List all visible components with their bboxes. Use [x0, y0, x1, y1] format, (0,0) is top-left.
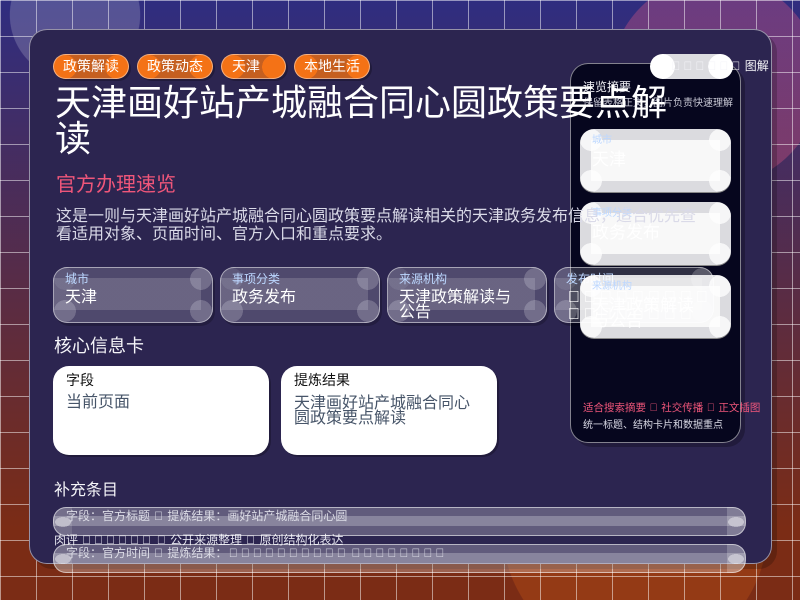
fact card: 发布时间 — [554, 267, 714, 323]
fact card: 发布时间:  — [568, 289, 712, 306]
side card: 来源机构: 天津政策解读 — [592, 291, 694, 316]
note line: 肉评   公开来源整理  原创结构化表达 — [54, 531, 344, 548]
intro paragraph: 这是一则与天津画好站产城融合同心圆政策要点解读相关的天津政务发布信息，适合优先查 — [56, 202, 696, 226]
fact card: 事项分类: 政务发布 — [232, 283, 296, 307]
intro paragraph — [56, 202, 696, 244]
top right label:  图解 — [671, 57, 769, 74]
side card: 事项分类: 事项分类 — [592, 204, 632, 219]
title — [55, 74, 667, 162]
tag: 天津: 天津 — [232, 56, 260, 76]
list row 2 — [53, 544, 746, 573]
top right pill — [650, 54, 733, 79]
title: 天津画好站产城融合同心圆政策要点解 — [55, 74, 667, 126]
list row 1: 字段：官方标题  提炼结果：画好站产城融合同心圆 — [66, 507, 347, 524]
intro paragraph: 看适用对象、页面时间、官方入口和重点要求。 — [56, 220, 392, 244]
side card: 来源机构: 来源机构 — [592, 277, 632, 292]
info card: 提炼结果: 天津画好站产城融合同心 — [294, 389, 470, 413]
side card: 事项分类 — [580, 202, 731, 265]
fact card: 来源机构: 天津政策解读与 — [399, 283, 511, 307]
section heading: 核心信息卡: 核心信息卡 — [54, 332, 144, 358]
tag: 政策解读 — [53, 54, 129, 79]
side panel note: use cases: 适合搜索摘要  社交传播  正文插图 — [583, 400, 760, 415]
fact card: 来源机构: 公告 — [399, 298, 431, 322]
info card: 提炼结果: 提炼结果 — [294, 370, 350, 390]
fact card: 来源机构 — [387, 267, 547, 323]
tag: 政策动态: 政策动态 — [147, 56, 203, 76]
side panel heading: 速览摘要 — [583, 78, 631, 95]
tag: 本地生活: 本地生活 — [304, 56, 360, 76]
side card: 事项分类: 政务发布 — [592, 218, 660, 243]
side panel — [570, 63, 741, 443]
section heading: 补充条目: 补充条目 — [54, 476, 118, 500]
fact card: 城市: 城市 — [65, 270, 89, 287]
tag: 天津 — [221, 54, 286, 79]
tag: 政策动态 — [137, 54, 213, 79]
info card: 字段 — [53, 366, 269, 455]
side card: 来源机构: 与公告 — [592, 306, 643, 331]
fact card: 城市: 天津 — [65, 283, 97, 307]
side card: 来源机构 — [580, 275, 731, 338]
fact card: 城市 — [53, 267, 213, 323]
tag: 本地生活 — [294, 54, 370, 79]
info card: 字段: 当前页面 — [66, 388, 130, 412]
info card: 提炼结果: 圆政策要点解读 — [294, 404, 406, 428]
fact card: 事项分类: 事项分类 — [232, 270, 280, 287]
side card: 城市 — [580, 129, 731, 192]
list row 2: 字段：官方时间  提炼结果：  — [66, 544, 448, 561]
title: 读 — [55, 110, 91, 162]
fact card: 发布时间: 发布时间 — [566, 270, 614, 287]
side card: 城市: 天津 — [592, 145, 626, 170]
side panel description: 保留表格正文，图片负责快速理解 — [583, 94, 733, 109]
info card: 提炼结果 — [281, 366, 497, 455]
side card: 城市: 城市 — [592, 131, 612, 146]
tag: 政策解读: 政策解读 — [63, 56, 119, 76]
fact card: 来源机构: 来源机构 — [399, 270, 447, 287]
fact card: 发布时间:  — [568, 306, 696, 323]
list row 1 — [53, 507, 746, 536]
subtitle: 官方办理速览 — [56, 168, 176, 197]
side panel note: summary: 统一标题、结构卡片和数据重点 — [583, 416, 723, 431]
fact card: 事项分类 — [220, 267, 380, 323]
info card: 字段: 字段 — [66, 370, 94, 390]
